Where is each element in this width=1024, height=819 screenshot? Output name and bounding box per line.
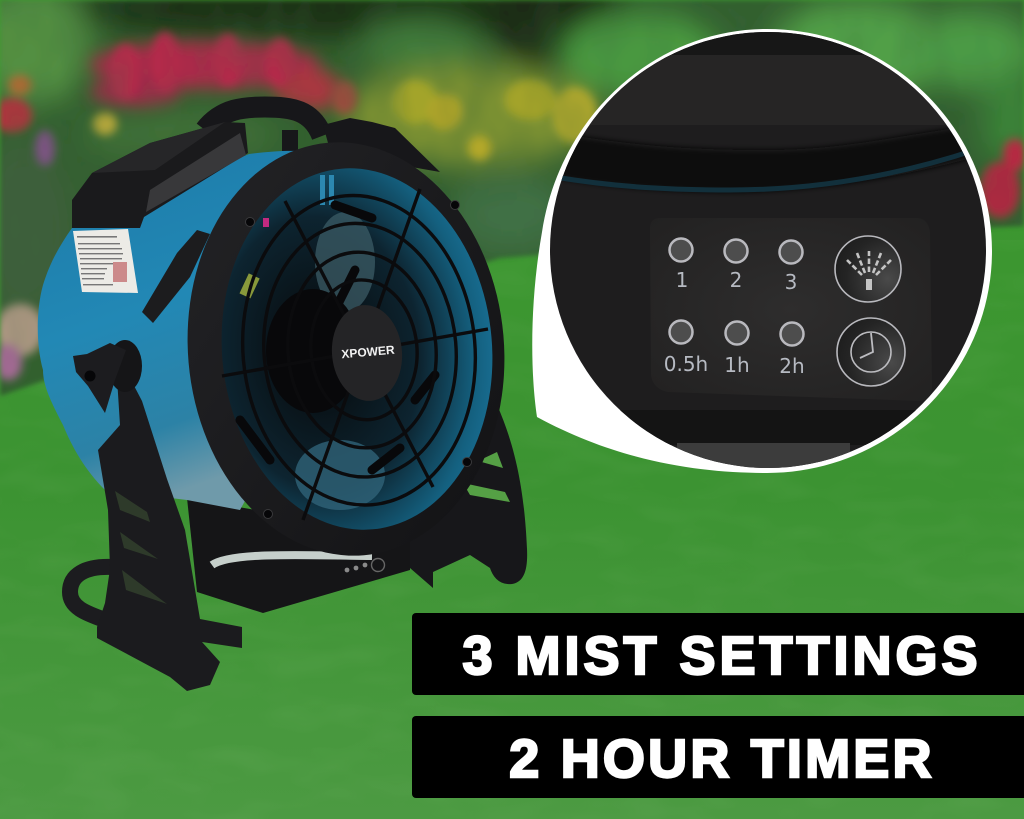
fan interior — [207, 157, 507, 541]
mist and timer lights — [670, 238, 804, 346]
setting labels: 1 — [676, 268, 688, 292]
warning label — [73, 229, 138, 293]
setting labels: 1h — [724, 353, 750, 377]
ring bolts — [246, 200, 472, 518]
battery pack — [72, 122, 248, 228]
setting labels: 2 — [730, 268, 742, 292]
control panel plate — [650, 218, 932, 401]
product: misting fan — [38, 107, 527, 691]
hose connector — [142, 230, 210, 323]
white circle frame with tail — [532, 29, 992, 473]
rear stand right — [410, 407, 527, 588]
label: 3 mist settings — [412, 613, 1024, 695]
close-up of fan base — [540, 30, 1000, 470]
setting labels — [664, 268, 805, 378]
motor hub with XPOWER logo — [328, 302, 406, 404]
base timer lights — [345, 558, 384, 572]
setting labels: 3 — [785, 270, 797, 294]
front ring — [171, 129, 521, 569]
blue drum body — [38, 151, 340, 510]
label: 3 mist settings: 3 MIST SETTINGS — [462, 626, 982, 686]
adjustment knob — [73, 340, 142, 413]
icon: mist spray button — [835, 236, 901, 302]
handle post and ring mount — [282, 118, 440, 172]
top handle — [205, 107, 322, 136]
callout: magnified control panel — [532, 29, 1000, 473]
front stand arm — [97, 378, 242, 691]
guard spokes — [222, 189, 488, 520]
label: 2 hour timer — [412, 716, 1024, 798]
label: 2 hour timer: 2 HOUR TIMER — [509, 729, 935, 789]
base unit — [187, 498, 410, 613]
setting labels: 0.5h — [664, 352, 708, 376]
setting labels: 2h — [779, 354, 805, 378]
water tube — [212, 555, 372, 565]
guard grille — [230, 186, 488, 515]
curved base handle — [70, 567, 112, 620]
motor hub with XPOWER logo: XPOWER — [341, 343, 396, 361]
icon: clock timer button — [837, 318, 905, 386]
